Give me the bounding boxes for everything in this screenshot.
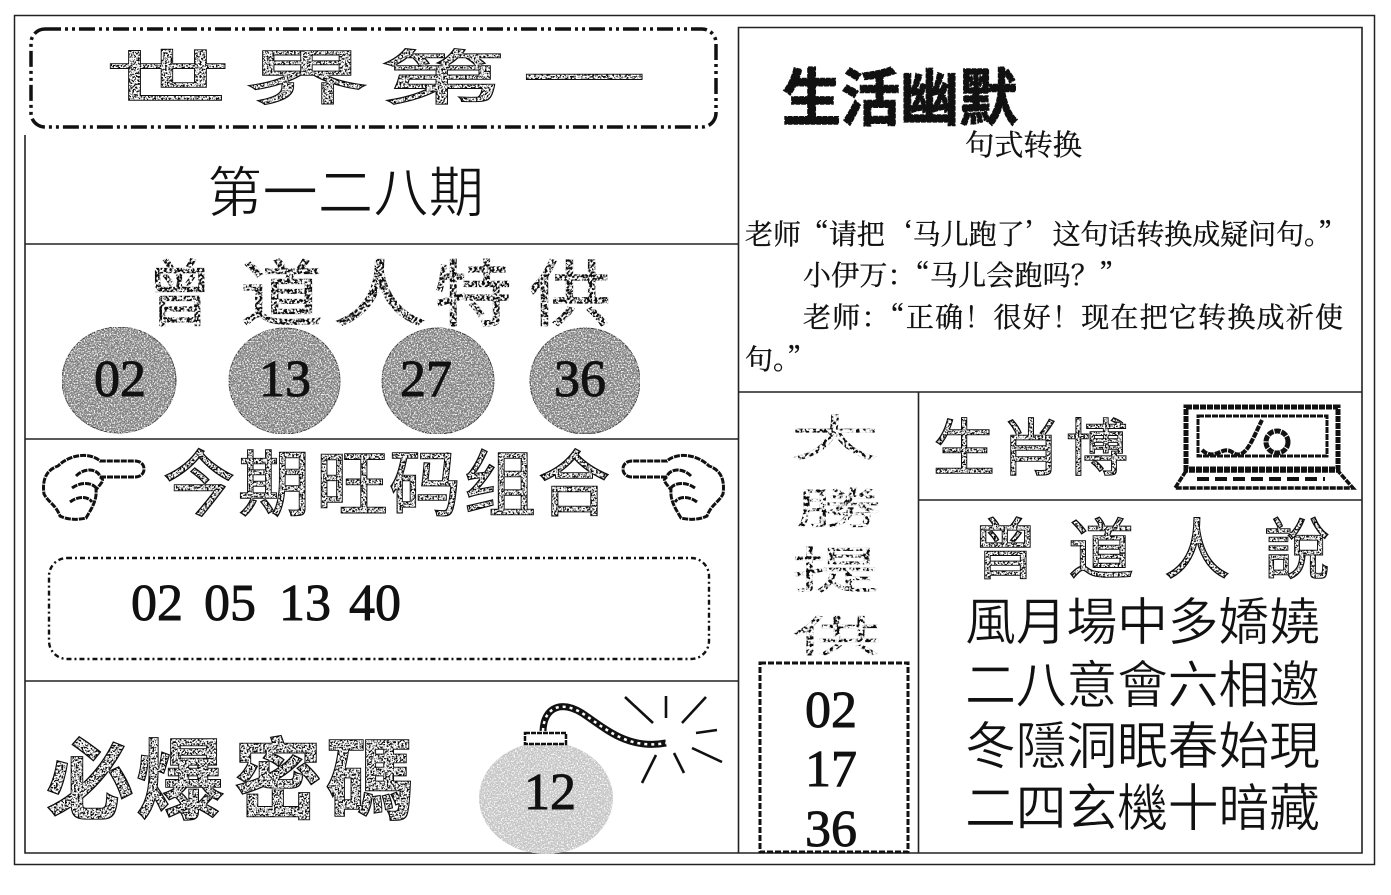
heading: 今 [163, 446, 235, 526]
heading: 合 [538, 446, 610, 526]
poem: 二四玄機十暗藏 [965, 780, 1320, 837]
heading: 曾 [147, 255, 212, 336]
panel: special numbers [62, 254, 640, 434]
heading: 码 [389, 446, 461, 526]
heading: 供 [528, 256, 611, 336]
combination numbers: 05 [204, 575, 256, 632]
heading: 生活幽默 [782, 65, 1018, 134]
heading: 肖 [1000, 415, 1062, 484]
ball numbers: 36 [554, 351, 606, 408]
hand right [623, 455, 723, 519]
subtitle: 句式转换 [965, 123, 1082, 164]
box numbers: 02 [805, 682, 857, 739]
icon: computer [1175, 407, 1353, 488]
heading: 道 [240, 256, 323, 336]
vertical heading [790, 412, 882, 661]
title border [31, 29, 716, 127]
ball numbers [94, 351, 606, 408]
heading: 說 [1264, 513, 1330, 587]
title text: 一 [522, 47, 646, 113]
panel: title [31, 29, 716, 127]
box numbers: 17 [805, 741, 857, 798]
heading: 人 [1164, 513, 1230, 587]
joke text [745, 213, 1346, 378]
hand left [44, 455, 144, 519]
title text [105, 45, 646, 113]
heading: 生 [933, 415, 995, 484]
heading: 人 [333, 254, 427, 336]
title text: 世 [105, 45, 230, 112]
heading: 密 [234, 732, 322, 831]
heading: 组 [464, 446, 536, 526]
vertical heading: 勝 [795, 485, 882, 533]
heading [46, 732, 414, 831]
poem: 二八意會六相邀 [965, 657, 1320, 714]
issue number: 第一二八期 [207, 162, 484, 224]
panel: secret code [46, 696, 722, 854]
joke text: 老师：“正确！很好！现在把它转换成祈使 [803, 296, 1343, 336]
ball numbers: 02 [94, 351, 146, 408]
panel: provided numbers [760, 412, 908, 858]
vertical heading: 提 [792, 544, 880, 599]
panel: lucky combination [44, 446, 723, 659]
numbers box [760, 663, 908, 852]
heading [147, 254, 611, 336]
heading: 特 [434, 255, 512, 335]
heading [933, 415, 1128, 484]
heading: 碼 [326, 732, 414, 831]
panel: Zeng Daoren says [965, 513, 1330, 837]
combination numbers [131, 575, 401, 632]
title text: 界 [244, 45, 369, 112]
heading: 曾 [972, 513, 1038, 587]
vertical heading: 供 [792, 613, 882, 661]
heading [163, 446, 610, 526]
heading: 旺 [316, 446, 388, 526]
joke text: 句。” [745, 338, 815, 378]
combination numbers: 13 [279, 575, 331, 632]
number balls [62, 327, 640, 434]
joke text: 小伊万：“马儿会跑吗？” [803, 254, 1127, 294]
combination box [49, 558, 709, 659]
heading: 道 [1068, 513, 1134, 587]
heading: 必 [46, 732, 134, 831]
poem [965, 594, 1320, 837]
heading: 爆 [136, 732, 224, 831]
ball numbers: 13 [259, 351, 311, 408]
heading: 期 [238, 446, 310, 526]
heading [972, 513, 1330, 587]
vertical heading: 大 [790, 412, 880, 467]
icon: bomb: 12 [524, 764, 576, 821]
title text: 第 [379, 45, 506, 111]
panel: life humor [745, 65, 1346, 378]
box numbers: 36 [805, 801, 857, 858]
heading: 博 [1066, 415, 1128, 484]
poem: 風月場中多嬌嬈 [965, 594, 1320, 651]
combination numbers: 40 [349, 575, 401, 632]
icon: bomb [479, 696, 722, 854]
combination numbers: 02 [131, 575, 183, 632]
ball numbers: 27 [400, 351, 452, 408]
joke text: 老师“请把‘马儿跑了’这句话转换成疑问句。” [745, 213, 1346, 253]
panel: zodiac [933, 407, 1353, 488]
poem: 冬隱洞眠春始現 [965, 718, 1320, 775]
box numbers [805, 682, 857, 858]
